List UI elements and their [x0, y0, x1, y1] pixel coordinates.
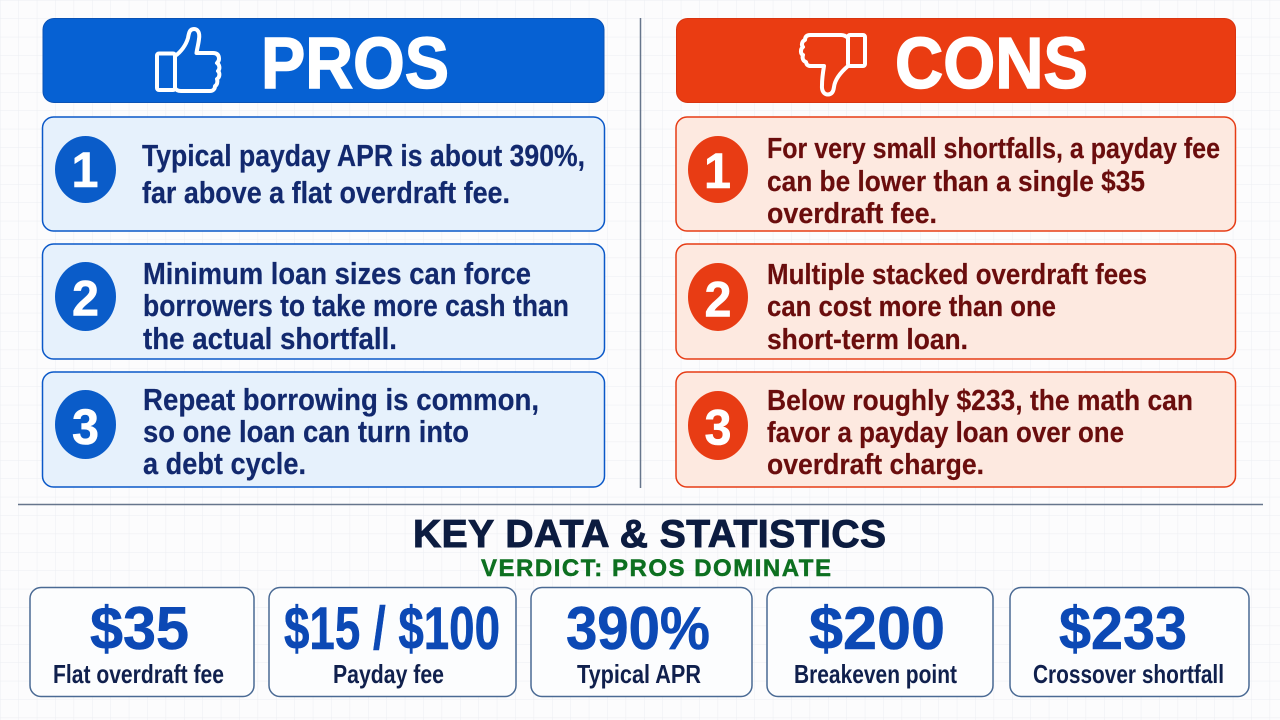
pros header banner — [43, 18, 604, 104]
panel: cons — [676, 18, 1236, 487]
stat card: typical APR: Typical APR — [577, 659, 701, 689]
panel: key statistics — [30, 588, 1249, 696]
number badge 3: 3 — [72, 399, 99, 455]
icon: thumbs up — [157, 29, 219, 91]
stat card: breakeven point: $200 — [809, 595, 945, 662]
stat card: crossover shortfall — [1010, 588, 1249, 696]
pro text 3: a debt cycle. — [143, 446, 306, 481]
number badge 3: 3 — [704, 400, 732, 456]
con text 2: Multiple stacked overdraft fees — [767, 259, 1147, 291]
pro card 3 — [42, 372, 604, 487]
con text 1: For very small shortfalls, a payday fee — [767, 133, 1220, 165]
pro card 1 — [42, 117, 604, 231]
number badge 1: 1 — [72, 142, 98, 198]
panel: pros — [42, 18, 604, 487]
con text 3: overdraft charge. — [767, 449, 984, 481]
stat card: payday fee: Payday fee — [333, 659, 444, 689]
pro text 3 — [143, 382, 539, 481]
cons header banner — [676, 18, 1236, 104]
pro text 2: Minimum loan sizes can force — [143, 256, 531, 291]
number badge 3 — [688, 391, 748, 460]
pro text 1: far above a flat overdraft fee. — [142, 175, 510, 210]
verdict: VERDICT: PROS DOMINATE — [481, 555, 831, 582]
stat card: typical APR — [531, 588, 752, 696]
pro text 3: so one loan can turn into — [143, 414, 469, 449]
con card 3 — [676, 372, 1236, 487]
icon: thumbs down — [801, 35, 865, 94]
pro text 1 — [142, 138, 585, 210]
con card 1 — [676, 117, 1236, 231]
pro card 2 — [42, 244, 604, 359]
stat card: flat overdraft fee: $35 — [90, 595, 189, 662]
con text 2: can cost more than one — [767, 291, 1056, 323]
stat card: breakeven point — [767, 588, 993, 696]
con text 2 — [767, 259, 1147, 356]
number badge 1 — [688, 136, 748, 203]
con text 1: overdraft fee. — [767, 198, 937, 230]
cons heading: CONS — [895, 24, 1088, 104]
number badge 1 — [55, 136, 116, 203]
number badge 2: 2 — [72, 270, 99, 326]
stat card: typical APR: 390% — [566, 595, 710, 662]
pro text 2 — [143, 256, 569, 356]
pro text 3: Repeat borrowing is common, — [143, 382, 539, 417]
con card 2 — [676, 244, 1236, 359]
number badge 1: 1 — [704, 143, 731, 199]
stat card: payday fee — [269, 588, 516, 696]
number badge 2 — [688, 263, 748, 331]
pro text 1: Typical payday APR is about 390%, — [142, 138, 585, 173]
number badge 2 — [55, 262, 116, 331]
con text 3: favor a payday loan over one — [767, 417, 1124, 449]
stat card: payday fee: $15 / $100 — [284, 595, 500, 662]
con text 2: short-term loan. — [767, 324, 968, 356]
number badge 3 — [55, 390, 116, 459]
stat card: flat overdraft fee: Flat overdraft fee — [53, 659, 224, 689]
stat card: crossover shortfall: $233 — [1059, 595, 1187, 662]
pros heading: PROS — [261, 24, 449, 104]
con text 3: Below roughly $233, the math can — [767, 385, 1193, 417]
con text 1 — [767, 133, 1220, 230]
stat card: breakeven point: Breakeven point — [794, 659, 957, 689]
stat card: flat overdraft fee — [30, 588, 254, 696]
pro text 2: the actual shortfall. — [143, 321, 397, 356]
number badge 2: 2 — [704, 272, 732, 328]
pro text 2: borrowers to take more cash than — [143, 288, 569, 323]
section title: KEY DATA & STATISTICS — [413, 513, 886, 556]
con text 1: can be lower than a single $35 — [767, 166, 1145, 198]
con text 3 — [767, 385, 1193, 481]
stat card: crossover shortfall: Crossover shortfall — [1033, 659, 1224, 689]
